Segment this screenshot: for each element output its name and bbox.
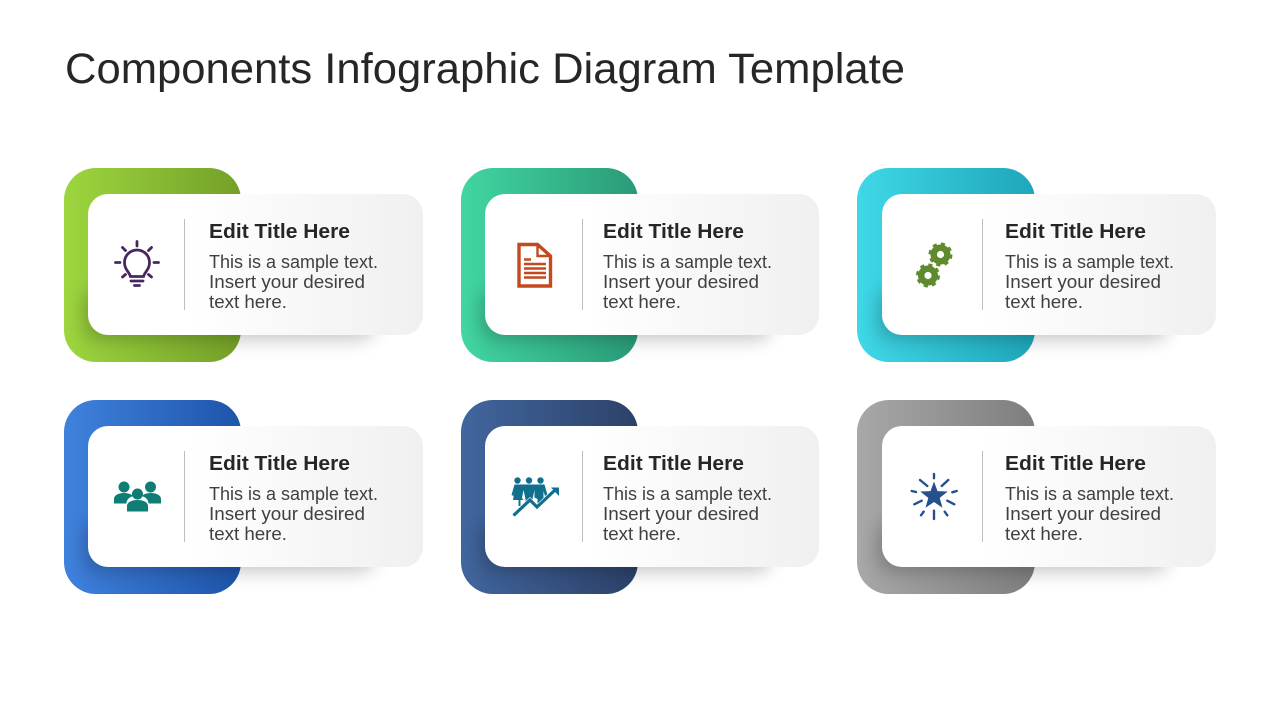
icon: gears [918, 244, 951, 286]
panel: star component [857, 400, 1216, 594]
white card [485, 426, 819, 567]
divider [582, 451, 583, 542]
card text [603, 453, 772, 544]
card text [1005, 221, 1174, 312]
card text [603, 221, 772, 312]
colored backing square [461, 168, 638, 362]
card text: This is a sample text. [603, 484, 772, 504]
icon: star burst [912, 474, 957, 519]
colored backing square [857, 168, 1035, 362]
white card [485, 194, 819, 335]
card shadow [878, 522, 1168, 572]
icon: lightbulb [116, 242, 158, 286]
card text: This is a sample text. [1005, 484, 1174, 504]
card text: Insert your desired [1005, 272, 1161, 292]
card text: Edit Title Here [209, 221, 350, 243]
card shadow [84, 290, 374, 340]
icon: team [114, 482, 161, 512]
white card [88, 194, 423, 335]
card text: text here. [603, 292, 681, 312]
card text [209, 453, 378, 544]
white card [88, 426, 423, 567]
card shadow [84, 522, 374, 572]
card text: Edit Title Here [1005, 453, 1146, 475]
card text: This is a sample text. [1005, 252, 1174, 272]
panel: growth component [461, 400, 819, 594]
card text: Edit Title Here [603, 453, 744, 475]
title: Components Infographic Diagram Template [65, 45, 905, 93]
panel: document component [461, 168, 819, 362]
card text: This is a sample text. [603, 252, 772, 272]
panel: lightbulb component [64, 168, 423, 362]
card shadow [481, 522, 771, 572]
colored backing square [64, 400, 241, 594]
card text: Insert your desired [209, 272, 365, 292]
colored backing square [64, 168, 241, 362]
card text: text here. [1005, 524, 1083, 544]
colored backing square [857, 400, 1035, 594]
divider [184, 219, 185, 310]
card text: Insert your desired [1005, 504, 1161, 524]
card text: This is a sample text. [209, 252, 378, 272]
card text: Edit Title Here [209, 453, 350, 475]
divider [982, 219, 983, 310]
card text: Edit Title Here [1005, 221, 1146, 243]
colored backing square [461, 400, 638, 594]
card shadow [481, 290, 771, 340]
panel: gears component [857, 168, 1216, 362]
white card [882, 194, 1216, 335]
icon: people with growth arrow [512, 477, 559, 516]
panel: team component [64, 400, 423, 594]
card text: Insert your desired [603, 504, 759, 524]
divider [582, 219, 583, 310]
card text: Insert your desired [209, 504, 365, 524]
white card [882, 426, 1216, 567]
card shadow [878, 290, 1168, 340]
card text: text here. [209, 524, 287, 544]
card text: This is a sample text. [209, 484, 378, 504]
divider [982, 451, 983, 542]
card text: text here. [603, 524, 681, 544]
divider [184, 451, 185, 542]
card text [1005, 453, 1174, 544]
card text: Insert your desired [603, 272, 759, 292]
card text: text here. [1005, 292, 1083, 312]
card text [209, 221, 378, 312]
icon: document [519, 244, 550, 286]
card text: text here. [209, 292, 287, 312]
card text: Edit Title Here [603, 221, 744, 243]
